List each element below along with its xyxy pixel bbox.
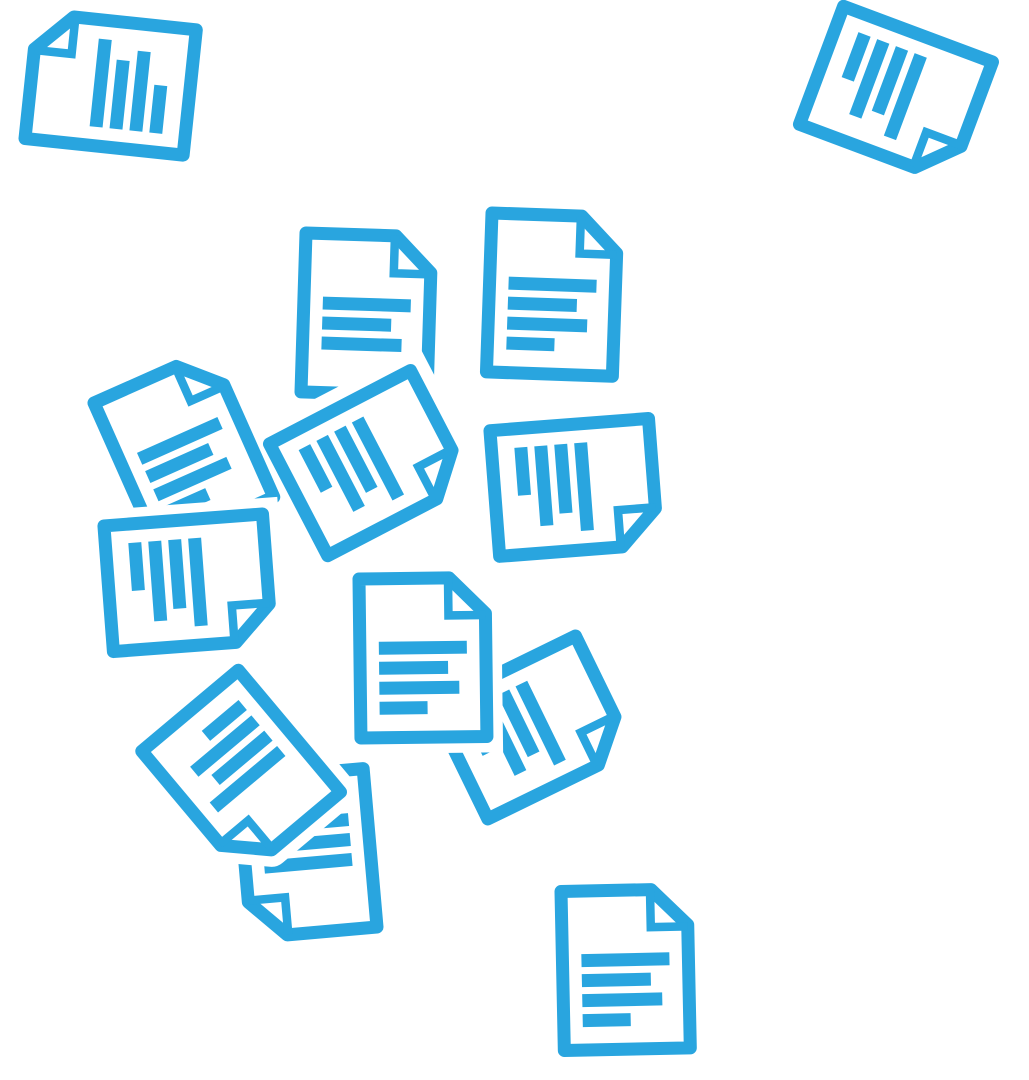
icon: document centre [359,577,487,738]
icon: document left middle [104,514,272,652]
icon: document upper centre right [486,213,618,376]
icon: document bottom [561,889,690,1050]
icon: document right of centre, behind [433,636,631,819]
icon: document upper centre left [301,233,432,396]
icon: document left, behind [94,352,274,548]
icon: document top left [25,13,196,155]
icon: document lower left, front [142,670,340,873]
icon: document top right [799,6,992,180]
icon: document tilted middle [269,370,469,556]
icon: document lower left, behind [238,769,377,938]
icon: document right middle [490,418,658,556]
